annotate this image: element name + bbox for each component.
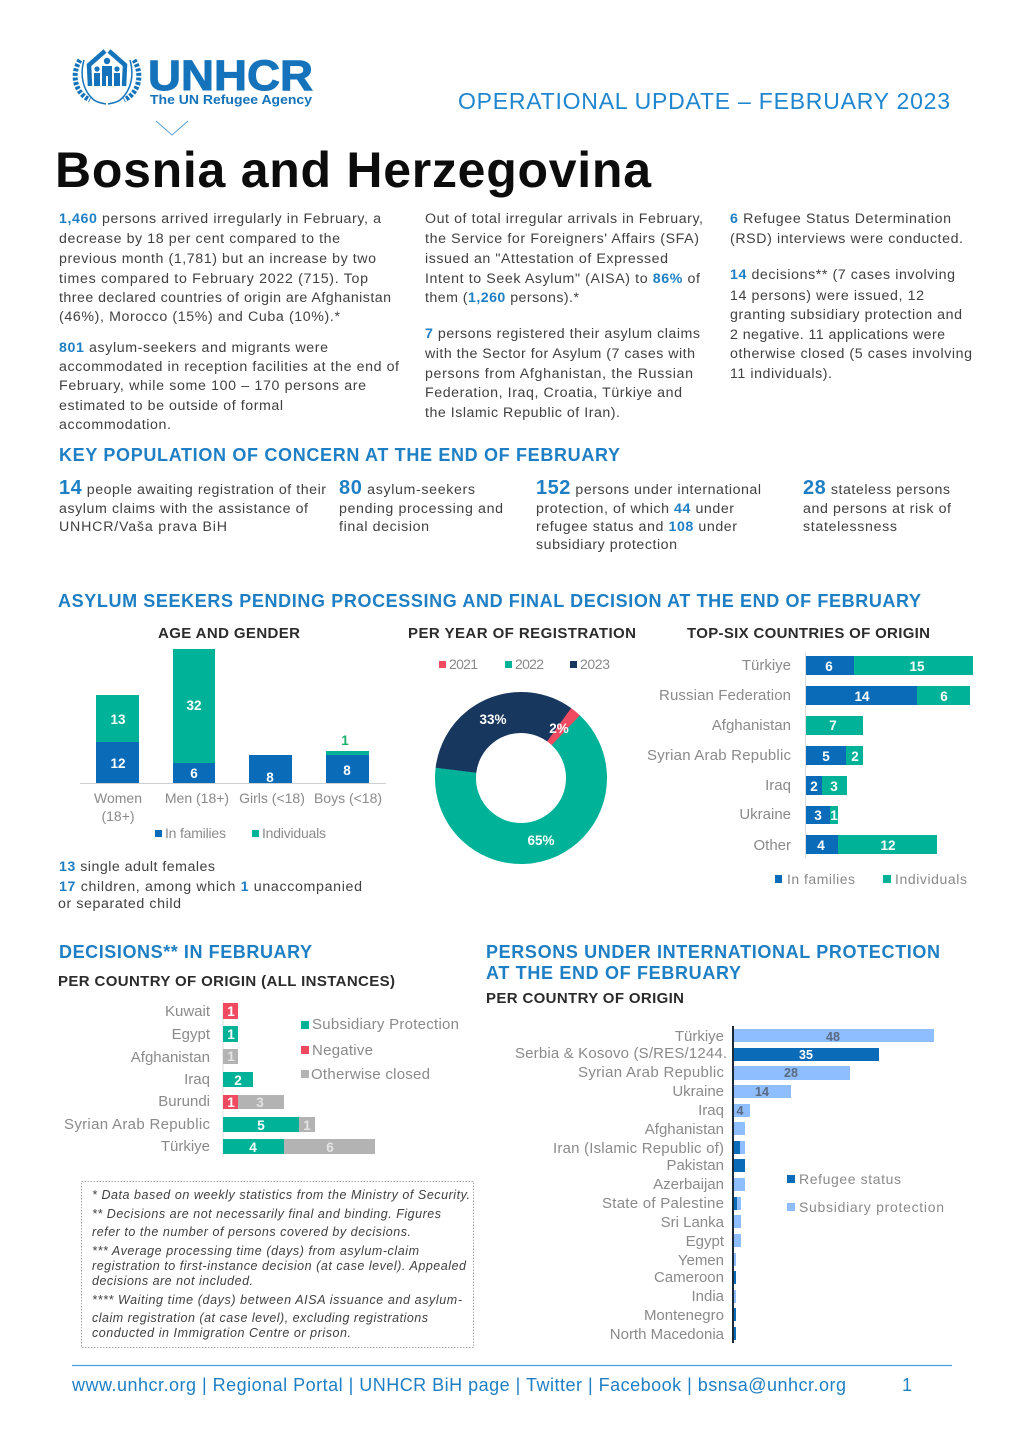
text block: RSD interviews and decisions: 14 persons) were issued, 12 — [730, 288, 924, 304]
bar chart: persons under protection per country: Serbia & Kosovo (S/RES/1244. — [515, 1045, 727, 1062]
text block: asylum intentions and registrations: persons from Afghanistan, the Russian — [425, 366, 693, 382]
bar chart: persons under protection per country — [515, 1026, 944, 1343]
key figure: 152 international protection: 152 persons under international — [536, 477, 761, 499]
bar chart: top-six countries of origin — [647, 625, 973, 887]
legend: Otherwise closed — [311, 1066, 430, 1083]
donut chart: per year of registration: 65% — [527, 833, 555, 848]
bar chart: decisions per country of origin — [64, 1000, 459, 1157]
bar chart: persons under protection per country: India — [691, 1288, 725, 1305]
legend: Individuals — [895, 871, 967, 887]
text block: asylum intentions and registrations: the Service for Foreigners' Affairs (SFA) — [425, 231, 699, 247]
bar chart: persons under protection per country: Syrian Arab Republic — [578, 1064, 724, 1081]
footnotes box: registration to first-instance decision (at case level). Appealed — [92, 1259, 467, 1273]
text block: age and gender notes — [58, 859, 362, 912]
heading: asylum seekers pending: ASYLUM SEEKERS PENDING PROCESSING AND FINAL DECISION AT THE END OF FEBRUARY — [58, 591, 921, 611]
bar chart: decisions per country of origin: 1 — [227, 1049, 235, 1064]
key figure: 14 awaiting registration — [59, 477, 326, 535]
legend: Subsidiary Protection — [312, 1016, 459, 1033]
text block: arrivals and accommodation: estimated to be outside of formal — [59, 398, 283, 414]
donut chart: per year of registration: 33% — [479, 712, 507, 727]
bar chart: decisions per country of origin: 1 — [227, 1004, 235, 1019]
text block: RSD interviews and decisions: 2 negative. 11 applications were — [730, 327, 945, 343]
legend: 2021 — [449, 656, 478, 672]
bar chart: persons under protection per country: 28 — [784, 1066, 798, 1080]
bar chart: top-six countries of origin: 14 — [854, 689, 870, 704]
bar chart: decisions per country of origin: 1 — [303, 1118, 311, 1133]
bar chart: decisions per country of origin: 1 — [227, 1027, 235, 1042]
donut chart: per year of registration — [408, 625, 636, 871]
key figure: 14 awaiting registration: 14 people awaiting registration of their — [59, 477, 326, 499]
text block: arrivals and accommodation: accommodation. — [59, 417, 171, 433]
bar chart: decisions per country of origin: Burundi — [158, 1093, 210, 1110]
text block: RSD interviews and decisions: 11 individuals). — [730, 366, 832, 382]
bar chart: top-six countries of origin: Russian Federation — [659, 687, 791, 704]
legend — [155, 825, 326, 841]
bar chart: decisions per country of origin: 6 — [326, 1140, 334, 1155]
bar chart: persons under protection per country: Afghanistan — [645, 1121, 724, 1138]
bar chart: age and gender: 12 — [110, 756, 126, 771]
bar chart: persons under protection per country: 14 — [755, 1085, 769, 1099]
footnotes box: decisions are not included. — [92, 1274, 253, 1288]
bar chart: top-six countries of origin: 2 — [810, 779, 818, 794]
bar chart: persons under protection per country: Ukraine — [672, 1083, 724, 1100]
text block: RSD interviews and decisions: 14 decisions** (7 cases involving — [730, 267, 955, 283]
text block: asylum intentions and registrations: Intent to Seek Asylum" (AISA) to 86% of — [425, 271, 700, 287]
legend: Refugee status — [799, 1171, 901, 1187]
footnotes box — [82, 1182, 474, 1348]
header: operational update: OPERATIONAL UPDATE – FEBRUARY 2023 — [458, 88, 950, 114]
text block: arrivals and accommodation: accommodated in reception facilities at the end of — [59, 359, 399, 375]
text block: age and gender notes: or separated child — [58, 896, 181, 912]
bar chart: persons under protection per country: State of Palestine — [602, 1195, 724, 1212]
bar chart: age and gender: Women — [94, 790, 142, 806]
text block: RSD interviews and decisions: (RSD) interviews were conducted. — [730, 231, 963, 247]
tagline: The UN Refugee Agency — [150, 92, 313, 107]
bar chart: persons under protection per country: Montenegro — [644, 1307, 724, 1324]
text block: arrivals and accommodation: 801 asylum-seekers and migrants were — [59, 340, 328, 356]
bar chart: top-six countries of origin: 3 — [814, 808, 822, 823]
title: Bosnia and Herzegovina — [55, 142, 652, 198]
text block: RSD interviews and decisions: 6 Refugee Status Determination — [730, 211, 951, 227]
chart title: TOP-SIX COUNTRIES OF ORIGIN — [687, 625, 930, 642]
key figure: 28 stateless: and persons at risk of — [803, 501, 951, 517]
bar chart: top-six countries of origin: Syrian Arab Republic — [647, 747, 792, 764]
key figure: 80 asylum-seekers: final decision — [339, 519, 429, 535]
subheading: per country of origin: PER COUNTRY OF ORIGIN — [486, 990, 684, 1007]
bar chart: decisions per country of origin: Syrian Arab Republic — [64, 1116, 210, 1133]
bar chart: top-six countries of origin: Afghanistan — [712, 717, 791, 734]
text block: RSD interviews and decisions: otherwise closed (5 cases involving — [730, 346, 972, 362]
bar chart: top-six countries of origin: Türkiye — [742, 657, 791, 674]
bar chart: top-six countries of origin: Other — [753, 837, 791, 854]
bar chart: top-six countries of origin: 3 — [830, 779, 838, 794]
bar chart: top-six countries of origin: 15 — [909, 659, 925, 674]
key figure: 80 asylum-seekers: pending processing and — [339, 501, 503, 517]
bar chart: decisions per country of origin: 3 — [256, 1095, 264, 1110]
legend — [439, 656, 610, 672]
bar chart: age and gender: 32 — [186, 698, 202, 713]
key figure: 80 asylum-seekers — [339, 477, 503, 535]
bar chart: decisions per country of origin: 1 — [227, 1095, 235, 1110]
key figure: 152 international protection: refugee status and 108 under — [536, 519, 737, 535]
bar chart: age and gender: 8 — [343, 763, 351, 778]
key figure: 152 international protection: protection, of which 44 under — [536, 501, 734, 517]
key figure: 152 international protection — [536, 477, 761, 553]
bar chart: persons under protection per country: North Macedonia — [610, 1326, 725, 1343]
bar chart: age and gender: 8 — [266, 770, 274, 785]
bar chart: age and gender: 6 — [190, 766, 198, 781]
bar chart: top-six countries of origin: 2 — [851, 749, 859, 764]
bar chart: decisions per country of origin: Iraq — [184, 1071, 210, 1088]
chart title: PER YEAR OF REGISTRATION — [408, 625, 636, 642]
bar chart: persons under protection per country: Egypt — [686, 1233, 725, 1250]
legend: Individuals — [262, 825, 326, 841]
bar chart: top-six countries of origin: 7 — [829, 718, 837, 733]
donut chart: per year of registration: 2% — [549, 721, 569, 736]
bar chart: age and gender: Boys (<18) — [314, 790, 382, 806]
text block: arrivals and accommodation: three declared countries of origin are Afghanistan — [59, 290, 391, 306]
key figure: 14 awaiting registration: UNHCR/Vaša prava BiH — [59, 519, 227, 535]
bar chart: persons under protection per country: Türkiye — [675, 1028, 724, 1045]
bar chart: decisions per country of origin: Egypt — [172, 1026, 211, 1043]
bar chart: persons under protection per country: Yemen — [678, 1252, 724, 1269]
footer links: www.unhcr.org | Regional Portal | UNHCR BiH page | Twitter | Facebook | bsnsa@unhcr.org — [71, 1375, 846, 1395]
bar chart: top-six countries of origin: Ukraine — [739, 806, 791, 823]
legend — [775, 871, 967, 887]
heading: persons under international protection: PERSONS UNDER INTERNATIONAL PROTECTION — [486, 942, 940, 962]
key figure: 152 international protection: subsidiary protection — [536, 537, 677, 553]
text block: arrivals and accommodation: (46%), Morocco (15%) and Cuba (10%).* — [59, 309, 340, 325]
footnotes box: *** Average processing time (days) from asylum-claim — [92, 1244, 419, 1258]
text block: asylum intentions and registrations: the Islamic Republic of Iran). — [425, 405, 620, 421]
bar chart: top-six countries of origin: 1 — [830, 808, 838, 823]
legend: 2022 — [515, 656, 544, 672]
bar chart: age and gender: Girls (<18) — [239, 790, 305, 806]
wordmark: UNHCR — [148, 52, 313, 100]
bar chart: decisions per country of origin: Afghanistan — [131, 1049, 210, 1066]
text block: arrivals and accommodation: 1,460 persons arrived irregularly in February, a — [59, 211, 381, 227]
subheading: decisions per country: PER COUNTRY OF ORIGIN (ALL INSTANCES) — [58, 973, 395, 990]
text block: asylum intentions and registrations: with the Sector for Asylum (7 cases with — [424, 346, 695, 362]
key figure: 14 awaiting registration: asylum claims with the assistance of — [59, 501, 308, 517]
text block: arrivals and accommodation: decrease by 18 per cent compared to the — [59, 231, 340, 247]
legend — [301, 1016, 459, 1083]
key figure: 28 stateless — [803, 477, 951, 535]
text block: age and gender notes: 13 single adult females — [59, 859, 215, 875]
heading: persons under international protection: AT THE END OF FEBRUARY — [486, 963, 741, 983]
heading: decisions: DECISIONS** IN FEBRUARY — [59, 942, 312, 962]
bar chart: decisions per country of origin: Kuwait — [165, 1003, 211, 1020]
legend: Negative — [312, 1042, 373, 1059]
bar chart: decisions per country of origin: Türkiye — [161, 1138, 210, 1155]
text block: arrivals and accommodation — [59, 211, 399, 433]
icon: chevron — [156, 121, 188, 135]
chart title: AGE AND GENDER — [158, 625, 300, 642]
legend: In families — [787, 871, 855, 887]
text block: asylum intentions and registrations: Out of total irregular arrivals in February, — [425, 211, 703, 227]
footnotes box: refer to the number of persons covered by decisions. — [92, 1225, 411, 1239]
bar chart: top-six countries of origin: 4 — [817, 838, 825, 853]
text block: asylum intentions and registrations: Federation, Iraq, Croatia, Türkiye and — [425, 385, 682, 401]
bar chart: decisions per country of origin: 4 — [249, 1140, 257, 1155]
footnotes box: * Data based on weekly statistics from the Ministry of Security. — [92, 1188, 470, 1202]
bar chart: age and gender: 1 — [341, 733, 349, 748]
text block: asylum intentions and registrations — [424, 211, 703, 421]
logo: UNHCR — [75, 51, 313, 107]
text block: age and gender notes: 17 children, among which 1 unaccompanied — [59, 879, 362, 895]
legend: Subsidiary protection — [799, 1199, 944, 1215]
bar chart: persons under protection per country: 35 — [799, 1048, 813, 1062]
bar chart: top-six countries of origin: 12 — [880, 838, 896, 853]
bar chart: persons under protection per country: Azerbaijan — [653, 1176, 724, 1193]
bar chart: persons under protection per country: Iran (Islamic Republic of) — [553, 1140, 724, 1157]
icon: laurel and sheltering hands — [75, 51, 139, 104]
legend: 2023 — [580, 656, 610, 672]
bar chart: age and gender: (18+) — [101, 808, 135, 824]
text block: arrivals and accommodation: times compared to February 2022 (715). Top — [59, 271, 368, 287]
legend — [787, 1171, 944, 1215]
bar chart: persons under protection per country: Cameroon — [654, 1269, 724, 1286]
footnotes box: ** Decisions are not necessarily final and binding. Figures — [92, 1207, 441, 1221]
text block: arrivals and accommodation: previous month (1,781) but an increase by two — [59, 251, 376, 267]
bar chart: persons under protection per country: Sri Lanka — [661, 1214, 725, 1231]
bar chart: top-six countries of origin: 5 — [822, 749, 830, 764]
page number: 1 — [902, 1375, 912, 1395]
footnotes box: claim registration (at case level), excluding registrations — [92, 1311, 428, 1325]
heading: persons under international protection — [486, 942, 940, 983]
bar chart: persons under protection per country: 48 — [826, 1030, 840, 1044]
bar chart: age and gender — [80, 625, 386, 841]
bar chart: persons under protection per country: 4 — [737, 1104, 744, 1118]
text block: arrivals and accommodation: February, while some 100 – 170 persons are — [59, 378, 366, 394]
text block: RSD interviews and decisions — [730, 211, 972, 382]
legend: In families — [165, 825, 226, 841]
text block: RSD interviews and decisions: granting subsidiary protection and — [730, 307, 962, 323]
bar chart: top-six countries of origin: 6 — [825, 659, 833, 674]
text block: asylum intentions and registrations: them (1,260 persons).* — [425, 290, 579, 306]
bar chart: decisions per country of origin: 2 — [234, 1073, 242, 1088]
text block: asylum intentions and registrations: 7 persons registered their asylum claims — [425, 326, 700, 342]
footnotes box: **** Waiting time (days) between AISA issuance and asylum- — [92, 1293, 462, 1307]
key figure: 80 asylum-seekers: 80 asylum-seekers — [339, 477, 475, 499]
heading: key population: KEY POPULATION OF CONCERN AT THE END OF FEBRUARY — [59, 445, 620, 465]
key figure: 28 stateless: 28 stateless persons — [803, 477, 950, 499]
bar chart: top-six countries of origin: Iraq — [765, 777, 791, 794]
bar chart: age and gender: Men (18+) — [165, 790, 229, 806]
key figure: 28 stateless: statelessness — [803, 519, 897, 535]
bar chart: age and gender: 13 — [110, 712, 126, 727]
footnotes box: conducted in Immigration Centre or prison. — [92, 1326, 351, 1340]
bar chart: decisions per country of origin: 5 — [257, 1118, 265, 1133]
text block: asylum intentions and registrations: issued an "Attestation of Expressed — [425, 251, 668, 267]
bar chart: top-six countries of origin: 6 — [940, 689, 948, 704]
bar chart: persons under protection per country: Iraq — [698, 1102, 724, 1119]
bar chart: persons under protection per country: Pakistan — [666, 1157, 724, 1174]
